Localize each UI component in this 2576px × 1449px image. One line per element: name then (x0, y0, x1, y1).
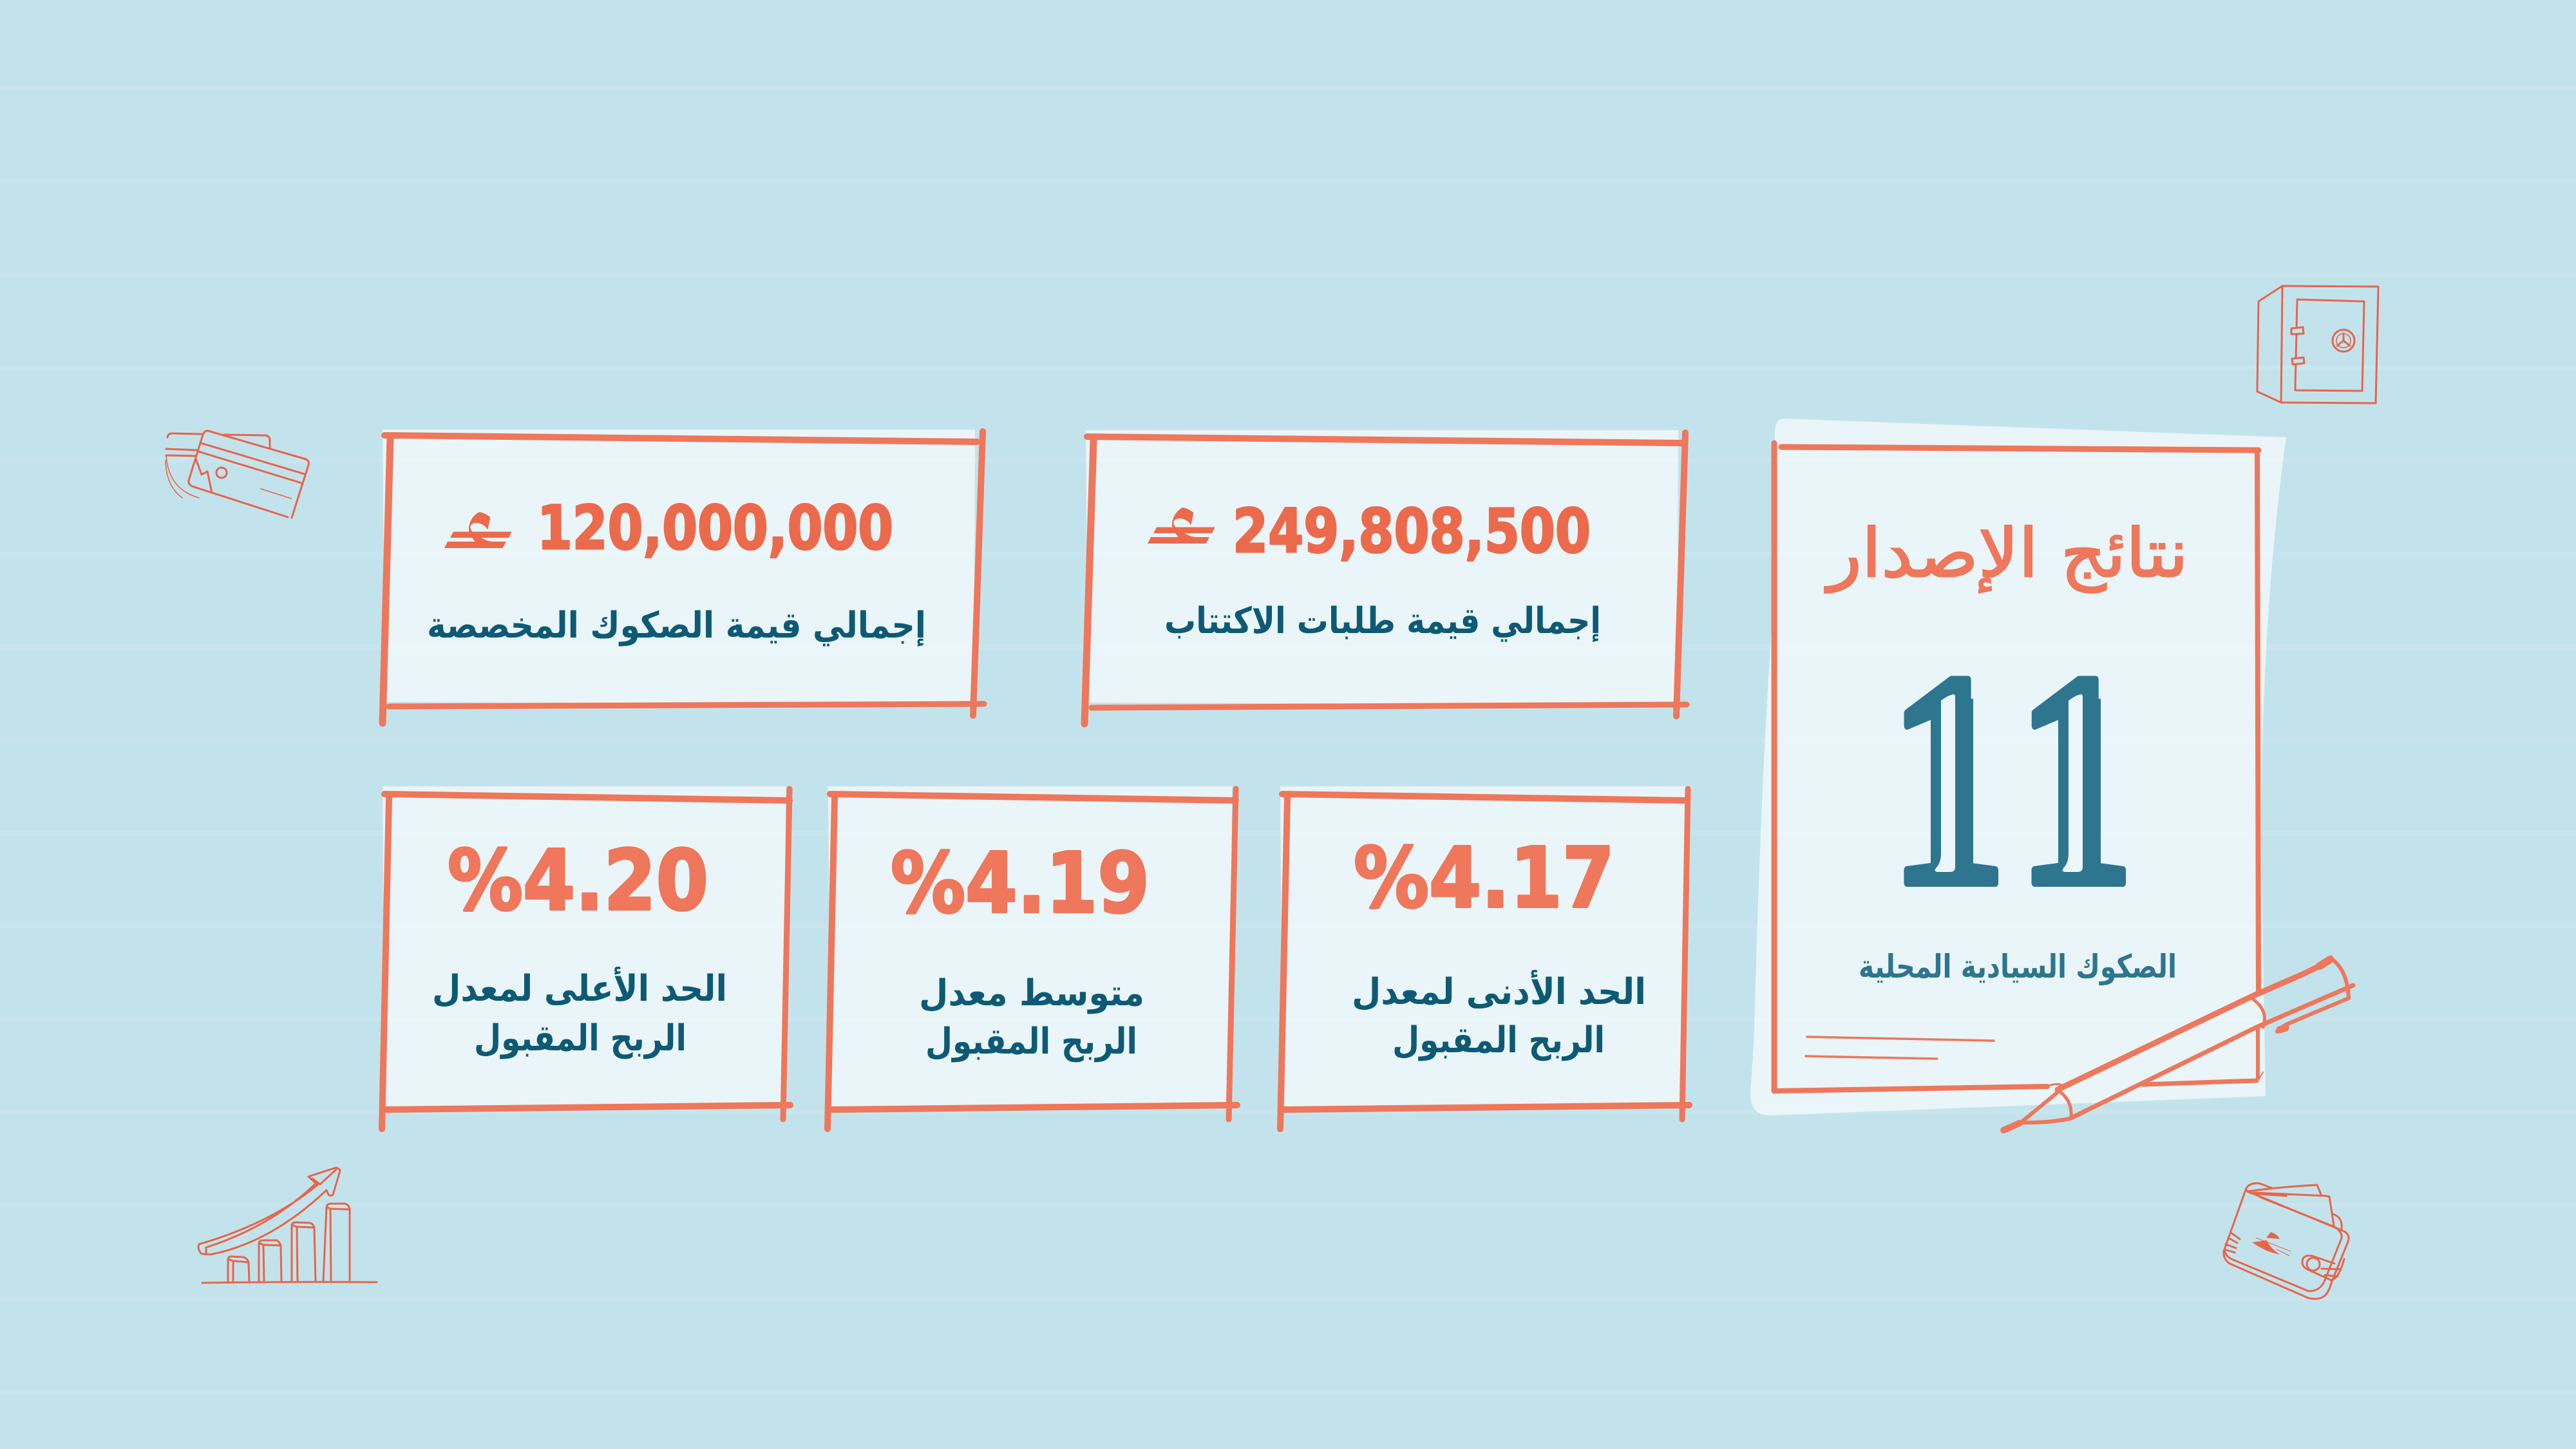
icon: growth chart (198, 1168, 377, 1283)
label (1352, 969, 1646, 1061)
card: average rate (828, 786, 1237, 1129)
label (432, 966, 727, 1059)
riyal symbol (1148, 507, 1215, 544)
label: متوسط معدل (919, 972, 1144, 1014)
big number 11: 11 (1888, 609, 2136, 950)
sheet border (1774, 443, 2263, 1091)
panel: issuance summary sheet (1750, 419, 2286, 1115)
note lines (1806, 1037, 1994, 1059)
card: subscription value (1084, 430, 1687, 724)
label: الربح المقبول (925, 1021, 1137, 1063)
value: 120,000,000 (537, 493, 893, 564)
value: %4.20 (448, 833, 708, 929)
card fill (383, 786, 786, 1108)
label: الحد الأدنى لمعدل (1352, 969, 1646, 1013)
label (919, 972, 1144, 1063)
subtitle: الصكوك السيادية المحلية (1859, 948, 2177, 986)
card border (1084, 433, 1687, 724)
label: الحد الأعلى لمعدل (432, 966, 727, 1010)
card fill (828, 786, 1232, 1108)
value: %4.19 (891, 835, 1150, 932)
card fill (383, 430, 975, 704)
label: إجمالي قيمة الصكوك المخصصة (427, 605, 926, 647)
title: نتائج الإصدار (1824, 514, 2188, 593)
card border (1280, 789, 1689, 1129)
riyal symbol (444, 512, 512, 548)
card: lowest rate (1280, 786, 1689, 1129)
card border (383, 431, 984, 723)
card fill (1086, 430, 1678, 705)
paper sheet (1750, 419, 2286, 1115)
card border (382, 789, 790, 1129)
card border (828, 789, 1237, 1129)
icon: wallet (2224, 1183, 2349, 1299)
value: 249,808,500 (1233, 497, 1591, 567)
icon: safe (2257, 286, 2378, 403)
value: %4.17 (1354, 830, 1615, 927)
card: highest rate (382, 786, 790, 1129)
label: إجمالي قيمة طلبات الاكتتاب (1164, 600, 1601, 642)
label: الربح المقبول (474, 1018, 687, 1059)
card fill (1280, 786, 1685, 1108)
card: allocated value (383, 430, 984, 723)
icon: bank cards (166, 431, 309, 518)
icon: pen (2003, 958, 2353, 1130)
label: الربح المقبول (1392, 1019, 1605, 1061)
